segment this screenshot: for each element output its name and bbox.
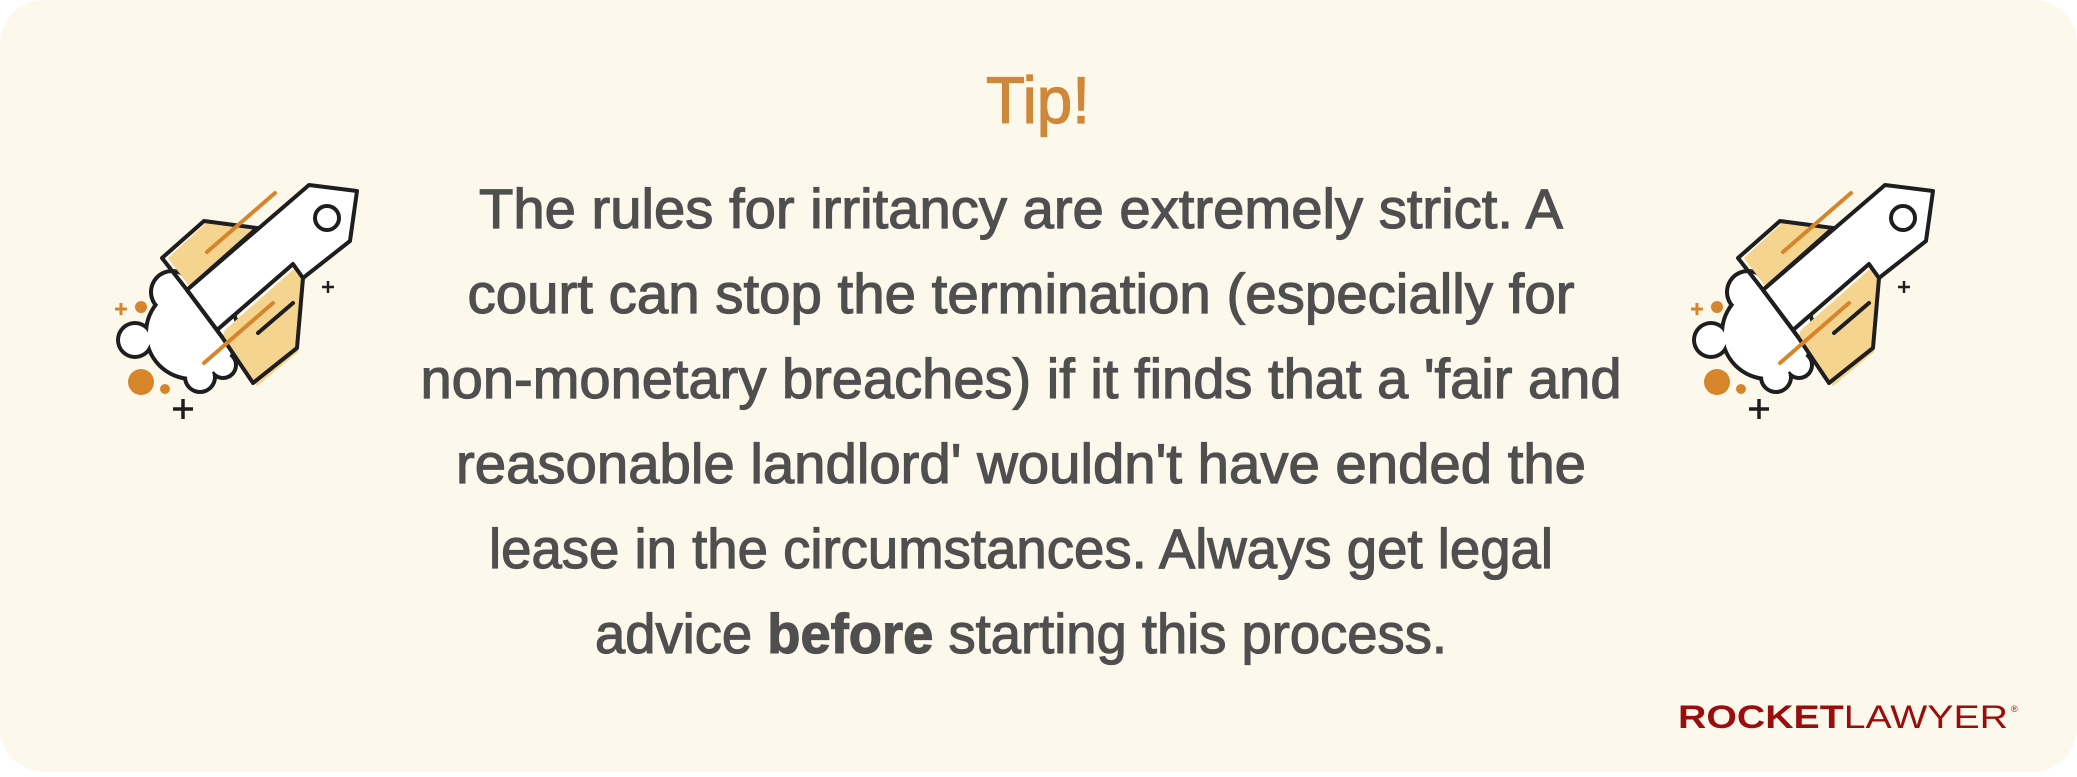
body text: court can stop the termination (especially for (468, 262, 1574, 325)
body text: advice before starting this process. (595, 602, 1447, 665)
logo: ® (2011, 704, 2018, 714)
body text: reasonable landlord' wouldn't have ended the (456, 432, 1586, 495)
icon: left rocket (115, 185, 357, 419)
body text: lease in the circumstances. Always get legal (489, 517, 1553, 580)
icon: right rocket (1691, 185, 1933, 419)
title: Tip! (986, 63, 1090, 137)
body text: non-monetary breaches) if it finds that a 'fair and (420, 347, 1622, 410)
body text (420, 177, 1622, 665)
logo: ROCKET LAWYER (1678, 699, 2008, 735)
body text: The rules for irritancy are extremely strict. A (479, 177, 1564, 240)
